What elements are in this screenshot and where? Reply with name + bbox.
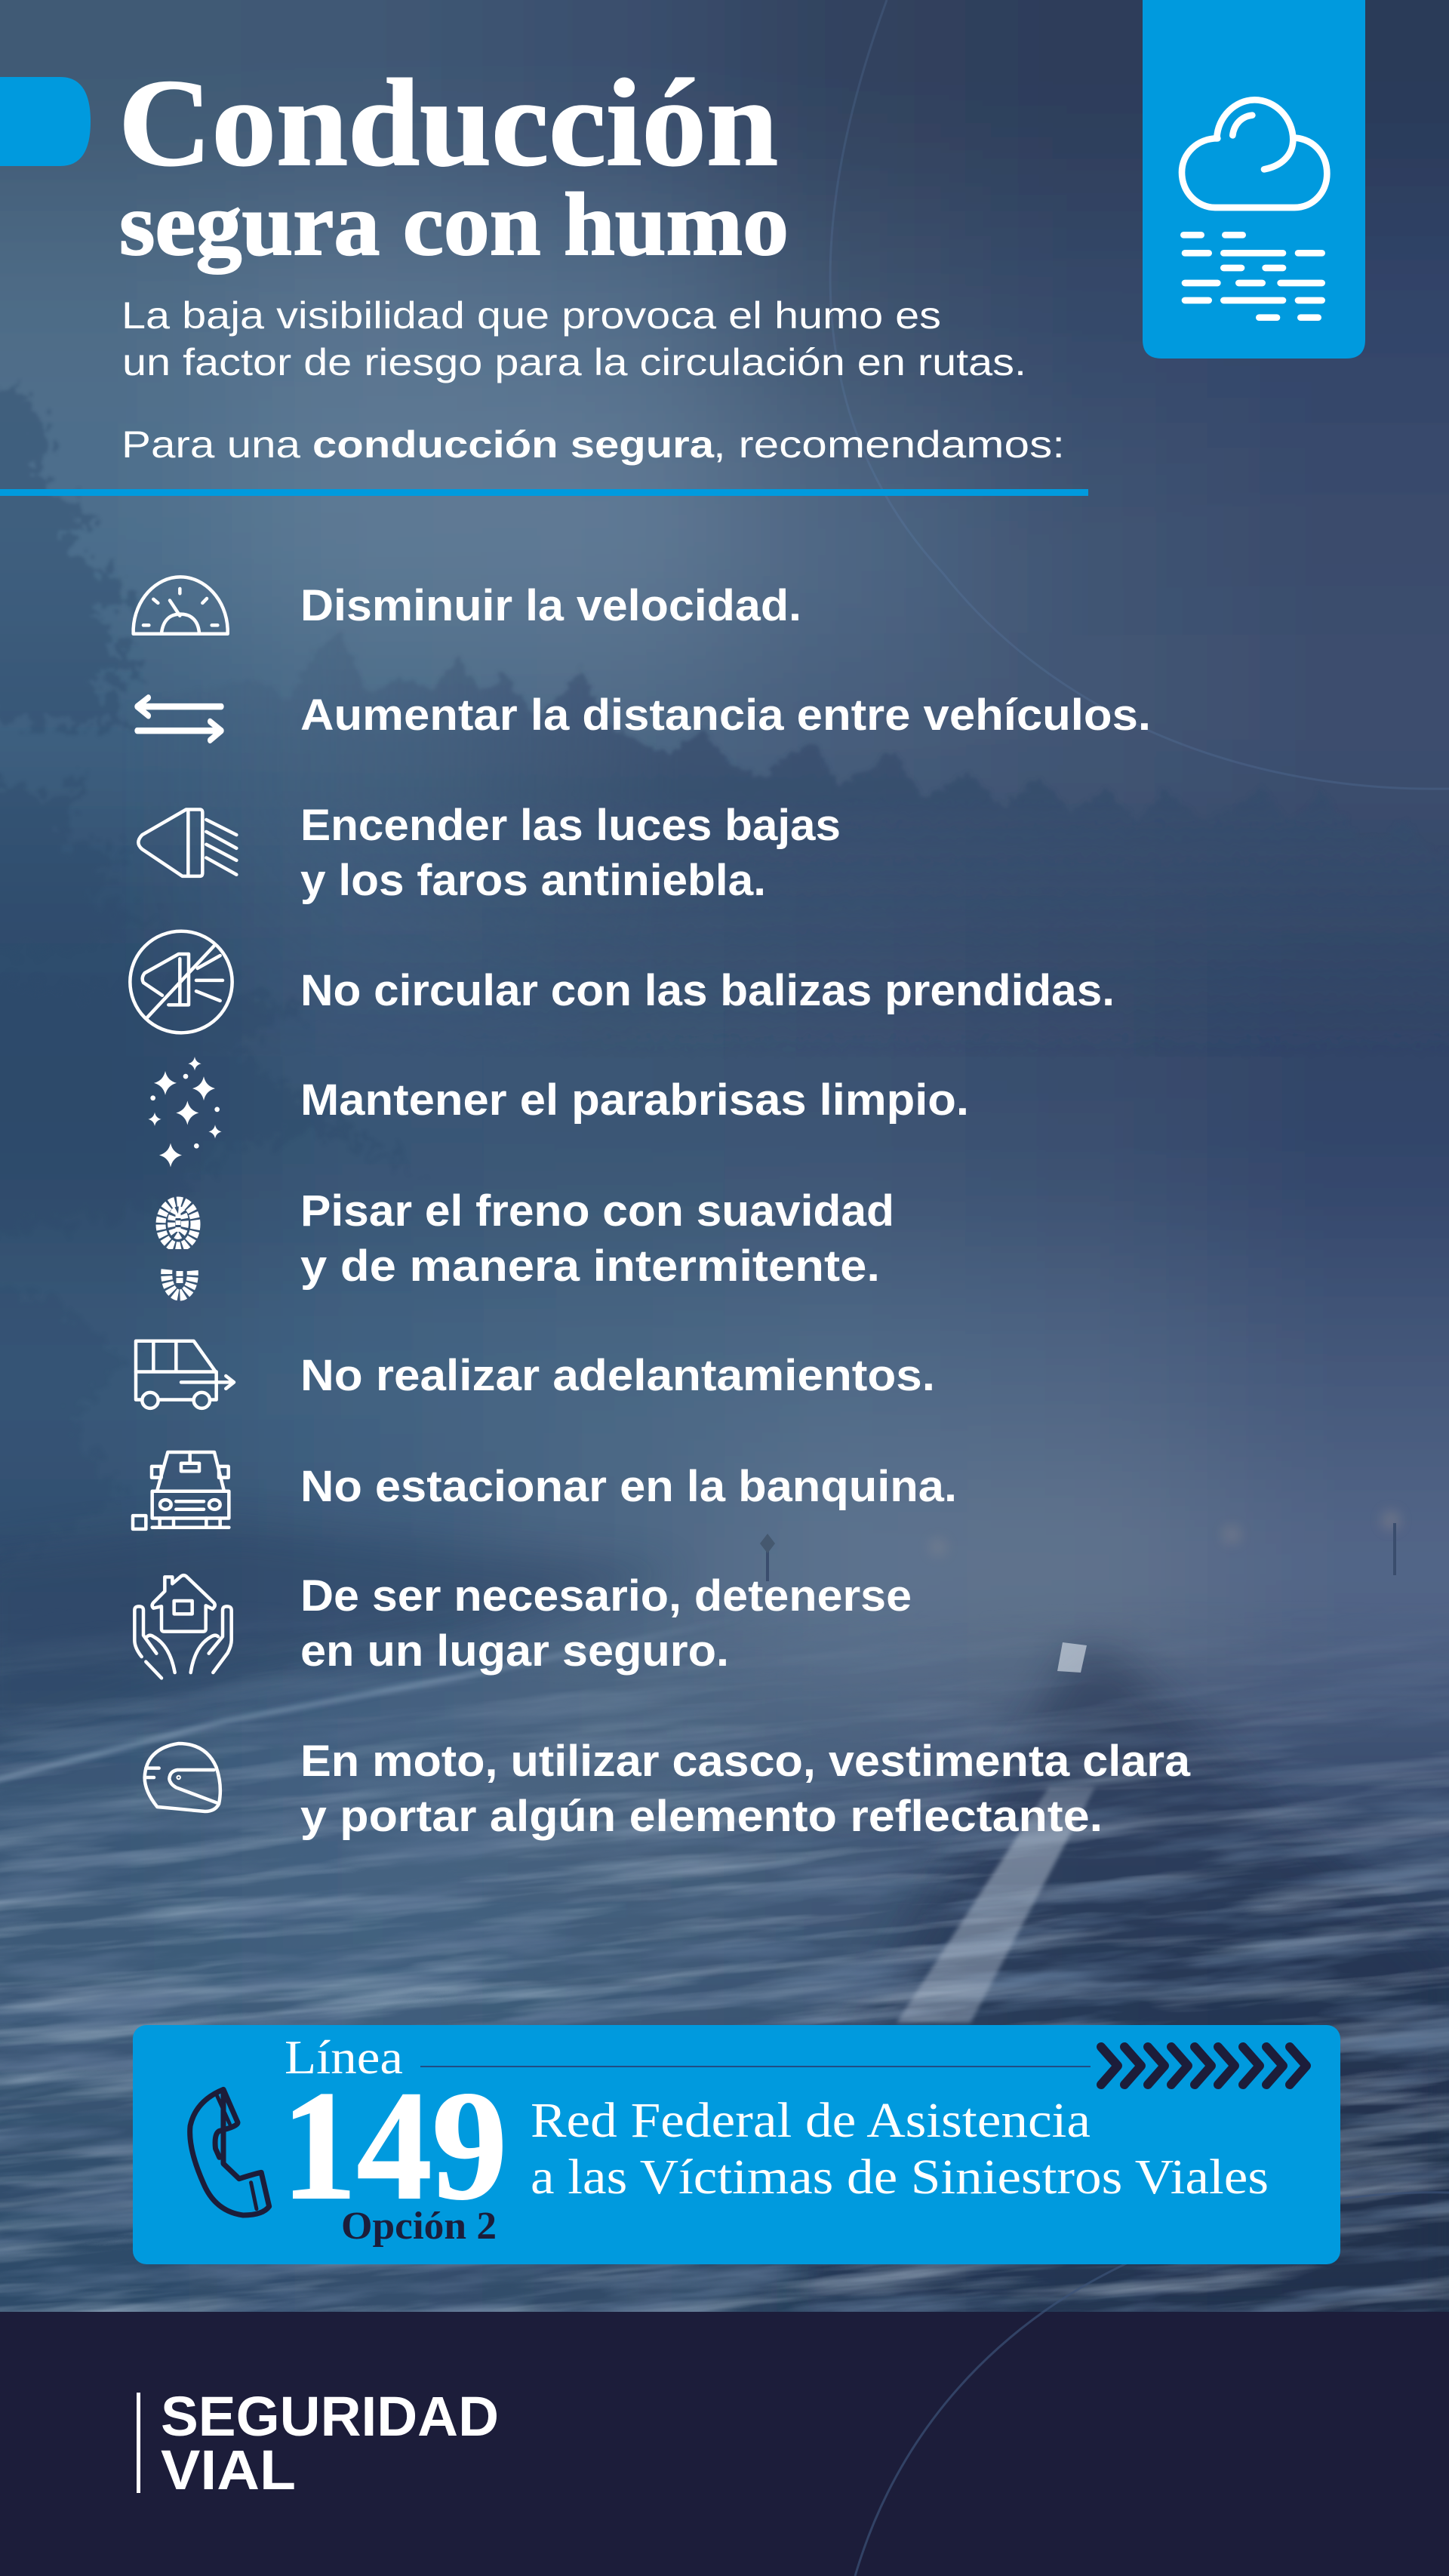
- number: 149: 149: [281, 2059, 507, 2232]
- text: option 2: Opción 2: [341, 2205, 497, 2248]
- panel: helpline: [133, 2025, 1340, 2264]
- title: Conducción: [118, 54, 778, 192]
- text: no hazards: No circular con las balizas prendidas.: [300, 966, 1115, 1015]
- text: motorcycle advice: y portar algún elemento reflectante.: [300, 1792, 1103, 1841]
- text: no shoulder parking: No estacionar en la banquina.: [300, 1462, 957, 1511]
- intro text: Para una: [122, 423, 300, 466]
- text: slow down: Disminuir la velocidad.: [300, 581, 801, 630]
- icon: two-way distance arrows: [137, 697, 221, 740]
- text: clean windshield: Mantener el parabrisas limpio.: [300, 1076, 969, 1125]
- icon: telephone handset: [190, 2089, 269, 2215]
- title accent tab: [0, 77, 91, 166]
- intro text: un factor de riesgo para la circulación en rutas.: [122, 341, 1026, 383]
- icon: motorcycle helmet: [145, 1743, 220, 1811]
- text: brake gently: Pisar el freno con suavidad: [300, 1186, 894, 1236]
- icon: parked car: [133, 1452, 229, 1529]
- panel: weather card with cloud and smoke icon: [1143, 0, 1365, 359]
- intro text: , recomendamos:: [713, 423, 1065, 466]
- intro text: La baja visibilidad que provoca el humo es: [122, 294, 941, 337]
- logo: Seguridad Vial: [137, 2385, 499, 2501]
- icon: chevrons: [1101, 2047, 1306, 2085]
- text: motorcycle advice: [300, 1737, 1191, 1841]
- text: motorcycle advice: En moto, utilizar casco, vestimenta clara: [300, 1737, 1191, 1786]
- text: stop in a safe place: De ser necesario, detenerse: [300, 1571, 912, 1620]
- text: low beams: Encender las luces bajas: [300, 801, 841, 850]
- logo: Seguridad Vial: VIAL: [161, 2439, 296, 2501]
- icon: clean windshield sparkles: [148, 1057, 222, 1167]
- logo: Seguridad Vial: SEGURIDAD: [161, 2385, 499, 2448]
- text: increase distance: Aumentar la distancia entre vehículos.: [300, 691, 1151, 740]
- title: segura con humo: [119, 174, 789, 274]
- text: network name: Red Federal de Asistencia: [531, 2093, 1091, 2148]
- text: no overtaking: No realizar adelantamientos.: [300, 1351, 935, 1400]
- icon: van with arrow: [136, 1341, 234, 1408]
- title: [118, 54, 789, 274]
- blue rule: [0, 489, 1088, 496]
- intro text: [122, 294, 1065, 466]
- icon: cloud and smoke lines: [1182, 100, 1327, 318]
- connector line: [420, 2066, 1091, 2067]
- icon: hands holding house: [134, 1575, 232, 1678]
- text: stop in a safe place: [300, 1571, 912, 1676]
- text: brake gently: [300, 1186, 894, 1291]
- text: stop in a safe place: en un lugar seguro.: [300, 1627, 729, 1676]
- text: brake gently: y de manera intermitente.: [300, 1242, 880, 1291]
- text: network name: a las Víctimas de Siniestros Viales: [531, 2150, 1269, 2205]
- intro text: conducción segura: [312, 423, 715, 466]
- icon: low-beam headlight: [138, 809, 236, 876]
- text: Línea: Línea: [285, 2030, 403, 2084]
- text: network name: [531, 2093, 1269, 2205]
- icon: speedometer: [134, 577, 228, 634]
- icon: boot print: [161, 1202, 195, 1295]
- icon: no hazard lights: [130, 931, 232, 1033]
- text: low beams: [300, 801, 841, 905]
- text: low beams: y los faros antiniebla.: [300, 856, 766, 905]
- list of recommendations: [130, 577, 1191, 1841]
- footer band: [0, 2193, 1449, 2576]
